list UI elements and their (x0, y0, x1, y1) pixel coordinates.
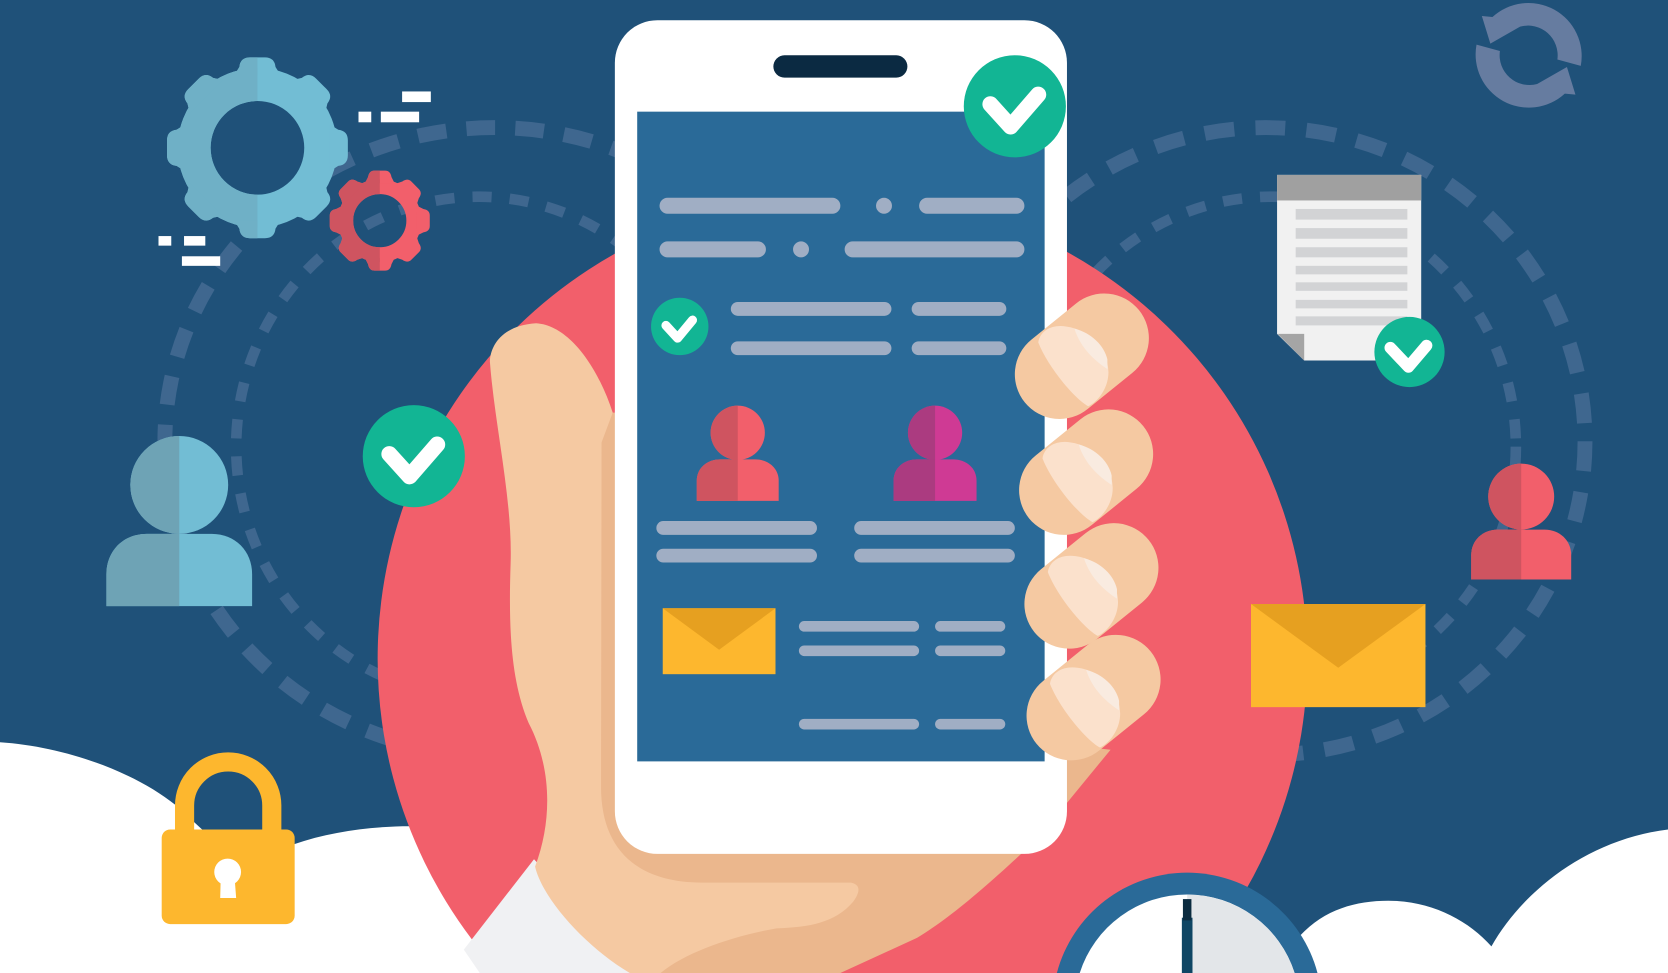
finger 1 (1038, 326, 1108, 406)
dashed orbit: left outer (165, 128, 824, 755)
finger 3 (1048, 556, 1118, 636)
hand: thumb and palm (490, 323, 858, 973)
phone speaker (773, 55, 907, 78)
finger 2 (1042, 442, 1113, 522)
screen text rows: checklist (731, 302, 1006, 355)
finger 4 (1050, 667, 1120, 748)
cloud: right (1277, 829, 1668, 973)
screen check badge (651, 298, 708, 355)
clock face shaded half (1187, 895, 1295, 973)
icon: sync arrows (1476, 3, 1582, 108)
screen contact: red person (697, 406, 779, 501)
clock face (1080, 894, 1295, 973)
screen contact: magenta person (894, 406, 977, 501)
phone screen (637, 112, 1045, 761)
motion dashes near gears (159, 91, 431, 266)
icon: document (1277, 175, 1421, 360)
icon: blue person (106, 436, 252, 606)
screen text rows: messages (799, 621, 1005, 729)
phone (615, 20, 1067, 854)
dashed orbit: right outer (947, 128, 1585, 755)
icon: small red gear (330, 171, 430, 271)
floating check badge (363, 405, 465, 507)
screen envelope (663, 608, 775, 674)
screen text rows: contacts (656, 521, 1015, 563)
clock ring (1057, 873, 1317, 973)
sleeve cuff (464, 859, 638, 973)
phone body (615, 20, 1067, 854)
icon: large blue gear (167, 57, 348, 238)
document check badge (1374, 317, 1445, 387)
red circle behind hand (378, 194, 1307, 973)
icon: padlock (162, 762, 295, 924)
icon: red person (1471, 464, 1571, 580)
icon: clock (1057, 873, 1317, 973)
phone check badge (964, 55, 1066, 157)
dashed orbit: left inner (236, 197, 721, 697)
clock hand (1182, 899, 1192, 973)
screen text rows: top (660, 198, 1024, 257)
cloud: left (0, 742, 553, 973)
dashed orbit: right inner (1027, 197, 1516, 697)
fingers (1038, 326, 1120, 748)
icon: large envelope (1251, 604, 1425, 707)
hand: palm shadow (585, 413, 1111, 973)
